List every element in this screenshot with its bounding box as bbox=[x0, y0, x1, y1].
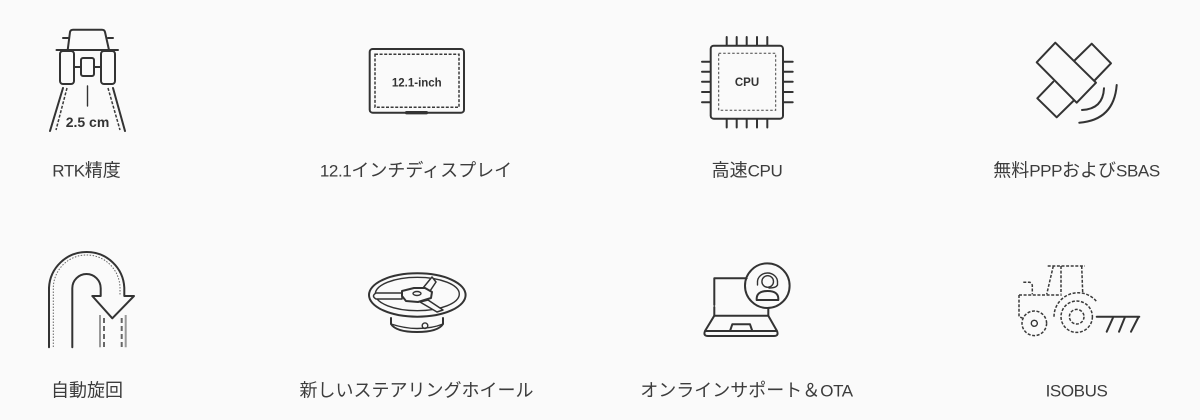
label: online support and OTA: オンラインサポート＆OTA bbox=[640, 380, 854, 400]
label: new steering wheel: 新しいステアリングホイール bbox=[300, 380, 534, 400]
label: fast CPU: 高速CPU bbox=[712, 160, 782, 180]
panel: auto turn bbox=[49, 252, 134, 400]
panel: fast CPU bbox=[702, 37, 793, 180]
panel: free PPP and SBAS bbox=[993, 43, 1160, 181]
icon: display bbox=[370, 49, 464, 114]
panel: 12.1-inch display bbox=[320, 49, 512, 180]
icon: tractor front view with 2.5 cm: 2.5 cm bbox=[66, 114, 109, 130]
icon: tractor front view with 2.5 cm bbox=[50, 30, 125, 131]
icon: tractor with implement bbox=[1019, 266, 1139, 336]
icon: display: 12.1-inch bbox=[392, 78, 442, 90]
label: RTK accuracy: RTK精度 bbox=[52, 160, 121, 180]
panel: RTK accuracy bbox=[50, 30, 125, 181]
label: auto turn: 自動旋回 bbox=[51, 380, 123, 400]
panel: ISOBUS bbox=[1019, 266, 1139, 400]
icon: laptop with support agent bbox=[704, 263, 790, 336]
icon: steering wheel bbox=[369, 273, 466, 332]
panel: online support and OTA bbox=[640, 263, 854, 400]
icon: U-turn arrow bbox=[49, 252, 134, 347]
label: free PPP and SBAS: 無料PPPおよびSBAS bbox=[993, 160, 1160, 180]
label: display: 12.1インチディスプレイ bbox=[320, 160, 512, 180]
label: ISOBUS: ISOBUS bbox=[1046, 382, 1107, 400]
panel: new steering wheel bbox=[300, 273, 534, 400]
icon: CPU chip bbox=[702, 37, 793, 128]
icon: satellite bbox=[1037, 43, 1117, 123]
icon: CPU chip: CPU bbox=[735, 77, 759, 89]
